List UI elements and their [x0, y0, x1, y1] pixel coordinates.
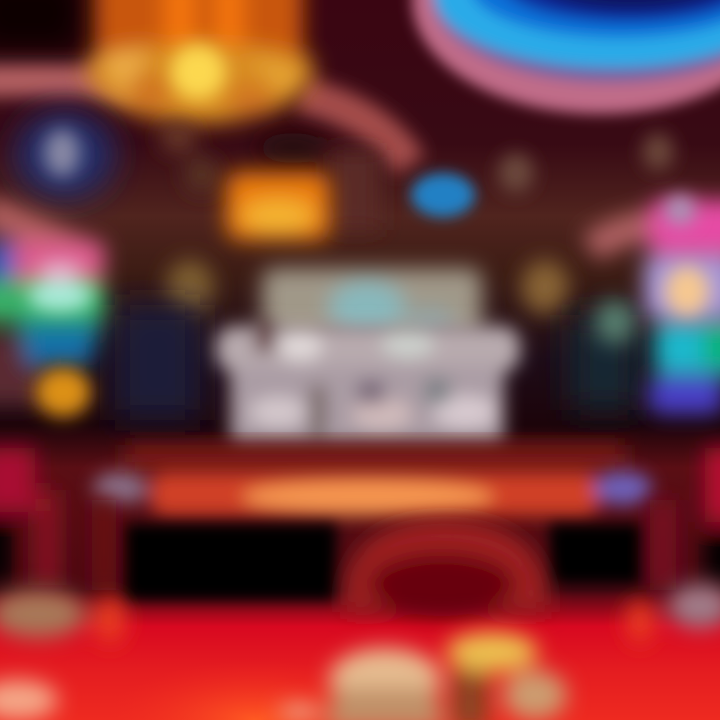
table base [124, 524, 642, 600]
casino chips stack [278, 632, 567, 720]
central illuminated sign [216, 268, 520, 444]
side armchairs [0, 448, 720, 590]
floor glow [60, 640, 460, 720]
distant tan lights [498, 133, 674, 193]
left slot highlights [28, 260, 92, 417]
ceiling ring lights [412, 0, 720, 114]
left slot machine [0, 210, 105, 405]
grey light in panel [44, 129, 80, 177]
gaming table [93, 445, 652, 516]
chandelier [86, 0, 314, 124]
dark machine columns [115, 305, 638, 420]
dark blue ceiling panel [15, 111, 115, 199]
table surface [93, 471, 652, 516]
right slot machine [590, 200, 720, 414]
dim green machine light [595, 300, 635, 344]
right slot highlights [665, 195, 709, 316]
orange lamp [226, 172, 330, 240]
sign upper block [262, 268, 482, 337]
wall lamps [166, 260, 569, 314]
chandelier bright core [170, 44, 226, 100]
right floor objects [626, 584, 720, 644]
sign lower blocks [216, 322, 520, 444]
dark top-left corner [0, 0, 85, 55]
left floor objects [0, 590, 126, 720]
pink ceiling arch [0, 80, 410, 165]
table upper rim [125, 445, 625, 471]
blue ceiling light [411, 173, 475, 217]
chandelier lower haze [160, 123, 380, 230]
red centre chair [343, 520, 548, 616]
